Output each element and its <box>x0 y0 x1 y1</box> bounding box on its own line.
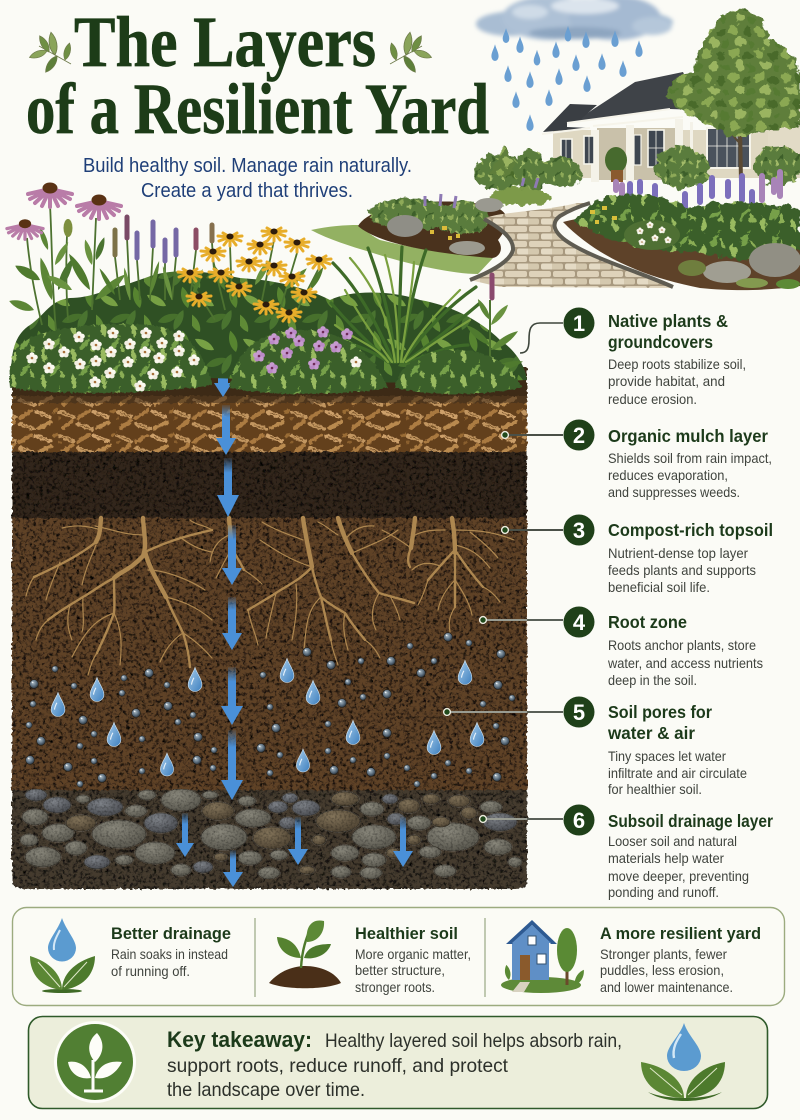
stone path <box>470 203 673 288</box>
title: of a Resilient Yard <box>26 69 489 149</box>
subtitle: Create a yard that thrives. <box>141 180 353 202</box>
title: The Layers <box>74 2 376 82</box>
layer label 2: 2 <box>573 423 585 448</box>
layer label 2: reduces evaporation, <box>608 468 728 483</box>
layer label 3: 3 <box>573 518 585 543</box>
tree <box>668 9 800 182</box>
layer label 2 <box>564 420 772 500</box>
text: better drainage: Rain soaks in instead <box>111 947 228 962</box>
layer label 1: 1 <box>573 311 585 336</box>
layer label 1: Deep roots stabilize soil, <box>608 357 746 372</box>
text: better drainage: Better drainage <box>111 924 231 943</box>
layer label 4: deep in the soil. <box>608 673 697 688</box>
subtitle <box>83 155 412 202</box>
layer: compost-rich topsoil <box>12 452 527 518</box>
connector lines and dots <box>444 323 563 822</box>
connector 4 <box>480 617 563 623</box>
water beads: soil pores <box>26 633 515 787</box>
roots <box>26 518 514 675</box>
subtitle: Build healthy soil. Manage rain naturally. <box>83 155 412 177</box>
layer label 5 <box>564 696 747 797</box>
layer label 4 <box>564 606 763 688</box>
icon: drop with sprout <box>30 918 95 993</box>
left garden bed <box>358 178 552 258</box>
grass clump <box>331 247 480 362</box>
text: a more resilient yard: A more resilient yard <box>600 924 761 943</box>
layer label 1 <box>564 308 746 407</box>
water drops in soil <box>51 658 484 776</box>
layer label 6: materials help water <box>608 851 724 866</box>
layer label 5: Soil pores for <box>608 702 712 722</box>
text: key takeaway <box>167 1027 622 1101</box>
layer label 6: Looser soil and natural <box>608 834 737 849</box>
layer label 6 <box>564 804 773 900</box>
text: healthier soil: stronger roots. <box>355 980 435 995</box>
text: healthier soil <box>355 924 471 995</box>
connector 3 <box>502 527 563 533</box>
layer label 5: water & air <box>607 723 695 743</box>
connector 2 <box>502 432 563 438</box>
text: key takeaway: the landscape over time. <box>167 1079 365 1101</box>
text: better drainage <box>111 924 231 979</box>
layer label 4: Root zone <box>608 612 687 632</box>
yellow black-eyed susans <box>178 228 331 322</box>
icon: house <box>501 920 586 993</box>
text: healthier soil: Healthier soil <box>355 924 458 943</box>
text: healthier soil: More organic matter, <box>355 947 471 962</box>
text: a more resilient yard: and lower maintenance. <box>600 980 733 995</box>
lavender spikes <box>115 217 212 261</box>
layer label 6: Subsoil drainage layer <box>608 811 773 831</box>
icon: left leaf sprig <box>28 32 72 74</box>
layer label 1: Native plants & <box>608 311 728 331</box>
water flow arrows <box>176 357 413 887</box>
layer label 1: provide habitat, and <box>608 374 725 389</box>
text: key takeaway: support roots, reduce runoff, and protect <box>167 1055 509 1077</box>
layer label 5: 5 <box>573 700 585 725</box>
layer label 1: groundcovers <box>608 332 713 352</box>
panel: key takeaway <box>28 1016 768 1108</box>
text: healthier soil: better structure, <box>355 963 445 978</box>
layer label 3: beneficial soil life. <box>608 580 710 595</box>
rain drops <box>491 26 643 131</box>
connector 1 <box>520 323 563 353</box>
layer label 4: Roots anchor plants, store <box>608 638 756 653</box>
potted shrub <box>605 147 627 182</box>
plants above mulch <box>7 182 527 394</box>
illustration: house, garden and rain <box>311 0 800 290</box>
layer label 3: Compost-rich topsoil <box>608 520 773 540</box>
right plant with spike <box>460 275 524 373</box>
layer label 4: water, and access nutrients <box>607 656 763 671</box>
text: a more resilient yard: Stronger plants, fewer <box>600 947 727 962</box>
layer label 3: Nutrient-dense top layer <box>608 546 748 561</box>
layer label 1: reduce erosion. <box>608 392 697 407</box>
panel: soil cross-section <box>12 357 527 889</box>
left back shrubs <box>474 145 583 194</box>
layer label 6: ponding and runoff. <box>608 885 719 900</box>
layer label 2: Shields soil from rain impact, <box>608 451 772 466</box>
layer label 4: 4 <box>573 610 586 635</box>
layer label 3 <box>564 514 773 595</box>
layer: subsoil drainage base <box>12 790 527 889</box>
text: a more resilient yard <box>600 924 761 995</box>
icon: right leaf sprig <box>389 32 433 74</box>
layer: organic mulch <box>12 368 527 454</box>
foliage mass <box>12 271 527 382</box>
lawn <box>311 225 493 274</box>
tall stems and leaves <box>8 205 325 330</box>
layer label 2: and suppresses weeds. <box>608 485 740 500</box>
house <box>542 72 800 182</box>
title <box>26 2 489 149</box>
connector 5 <box>444 709 563 715</box>
coneflowers <box>7 182 121 239</box>
layer label 2: Organic mulch layer <box>608 426 768 446</box>
text: key takeaway: Key takeaway: <box>167 1027 312 1052</box>
icon: seedling in soil <box>269 920 341 988</box>
layer: soil base root zone and pores <box>12 515 527 800</box>
layer label 3: feeds plants and supports <box>608 563 756 578</box>
icon: leaf badge <box>54 1021 136 1103</box>
groundcover mound with white flowers <box>10 324 212 393</box>
icon: drop and leaves <box>641 1023 725 1101</box>
layer label 5: Tiny spaces let water <box>608 749 726 764</box>
layer label 6: move deeper, preventing <box>608 869 749 884</box>
fern foliage right <box>395 350 522 394</box>
text: key takeaway: Healthy layered soil helps absorb rain, <box>325 1030 622 1052</box>
layer label 6: 6 <box>573 808 585 833</box>
white flower bush <box>624 220 680 250</box>
cloud <box>476 0 673 40</box>
text: a more resilient yard: puddles, less erosion, <box>600 963 724 978</box>
groundcover mound with pink flowers <box>230 326 388 394</box>
connector 6 <box>480 816 563 822</box>
text: better drainage: of running off. <box>111 964 190 979</box>
right garden bed <box>563 145 800 290</box>
panel: benefits <box>12 908 784 1006</box>
layer label 5: infiltrate and air circulate <box>608 766 747 781</box>
gravel stones <box>20 789 522 879</box>
layer label 5: for healthier soil. <box>608 782 702 797</box>
